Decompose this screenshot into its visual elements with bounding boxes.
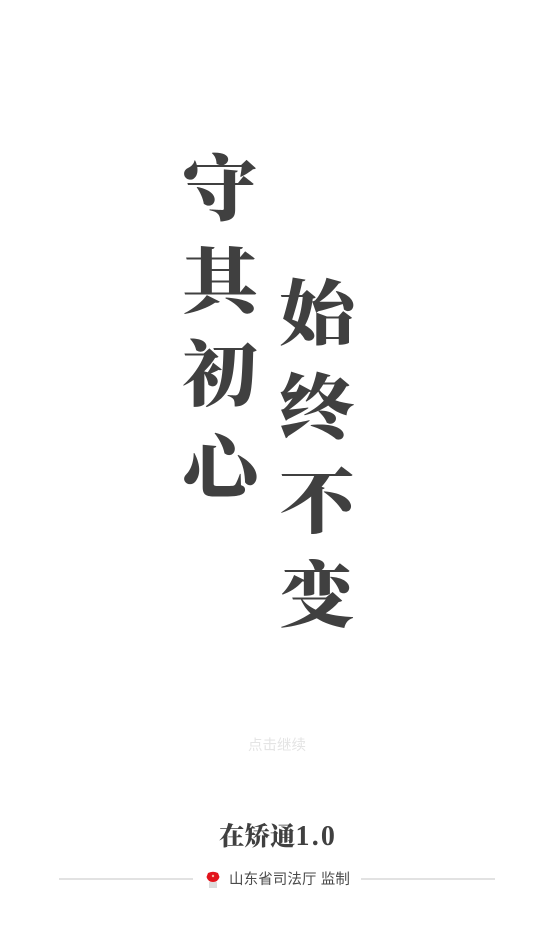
heading column: 守其初心: 其 (182, 226, 258, 328)
heading column: 守其初心: 初 (182, 319, 258, 421)
prompt: tap to continue: 点击继续 (248, 738, 306, 754)
heading column: 守其初心: 心 (182, 412, 258, 514)
heading column: 始终不变: 不 (279, 446, 355, 548)
heading column: 始终不变 (279, 258, 355, 642)
heading column: 始终不变: 变 (279, 540, 355, 642)
heading column: 始终不变: 终 (279, 352, 355, 454)
app name: 在矫通1.0 (219, 821, 337, 852)
icon: national emblem (206, 872, 220, 888)
heading column: 始终不变: 始 (279, 258, 355, 360)
divider left (59, 878, 193, 880)
heading column: 守其初心: 守 (182, 133, 258, 235)
supervising authority text: 山东省司法厅 监制 (229, 872, 350, 888)
divider right (361, 878, 495, 880)
heading column: 守其初心 (182, 133, 258, 514)
